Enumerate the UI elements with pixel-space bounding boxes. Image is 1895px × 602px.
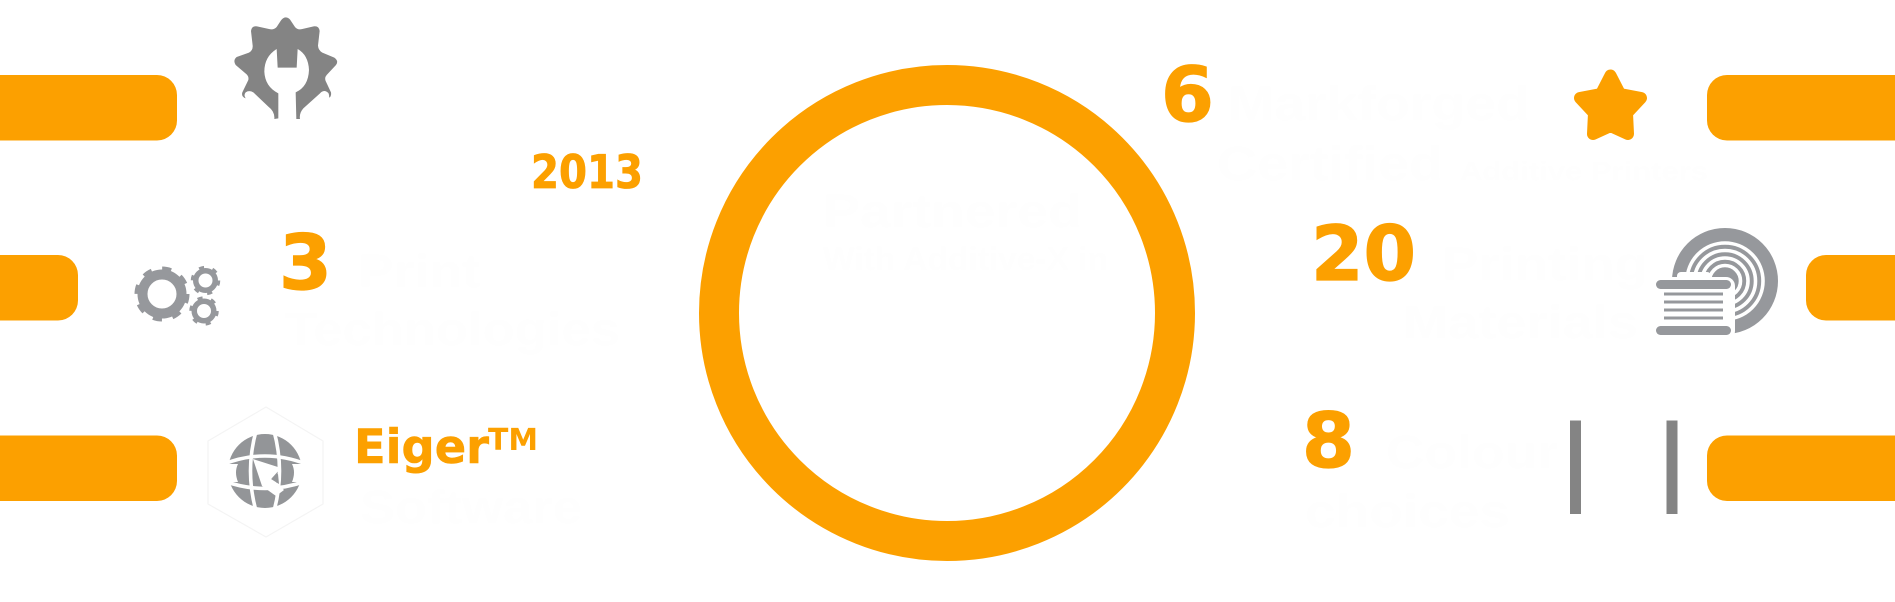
central text: With Additive-X in bbox=[823, 241, 1108, 277]
icon: filament spool bbox=[1653, 228, 1778, 340]
stat: 20 printing materials: Materials bbox=[1403, 296, 1638, 348]
heading: Eiger software: TM bbox=[488, 423, 538, 458]
stat: 2013: 2013 bbox=[531, 145, 643, 199]
central ring bbox=[719, 85, 1175, 541]
stat: 20 printing materials: Printing bbox=[1442, 238, 1648, 290]
stat: 3 print technologies: Technologies bbox=[285, 303, 620, 355]
heading: Eiger software bbox=[354, 420, 582, 533]
bar: left bottom bbox=[0, 436, 177, 501]
icon: globe in hexagon bbox=[208, 407, 323, 537]
stat: 20 printing materials: 20 bbox=[1311, 209, 1416, 298]
stat: 8 colour choices: Colour bbox=[1386, 426, 1558, 478]
bar: right top bbox=[1707, 75, 1895, 140]
icon: vertical filament bars bbox=[1570, 420, 1678, 514]
central text: Partnered bbox=[823, 185, 1082, 237]
stat: 3 print technologies bbox=[279, 218, 620, 355]
heading: Eiger software: Software bbox=[360, 481, 582, 533]
stat: 3 print technologies: Print bbox=[358, 245, 480, 297]
stat: 6 Markforged certified: Certified bbox=[1217, 138, 1443, 191]
bar: right bottom bbox=[1707, 436, 1895, 501]
icon: three gears bbox=[137, 268, 218, 324]
stat: 3 print technologies: 3 bbox=[279, 218, 332, 307]
icon: wrench in gear bbox=[234, 17, 337, 119]
bar: right middle bbox=[1806, 255, 1895, 320]
stat: 6 Markforged certified bbox=[1161, 50, 1708, 191]
icon: star bbox=[1580, 76, 1641, 134]
stat: 20 printing materials bbox=[1311, 209, 1648, 348]
bar: left middle bbox=[0, 255, 78, 320]
stat: 6 Markforged certified: Markforged bbox=[1228, 78, 1530, 131]
heading: Eiger software: Eiger bbox=[354, 420, 490, 475]
stat: 6 Markforged certified: 6 bbox=[1161, 50, 1214, 139]
bar: left top bbox=[0, 75, 177, 140]
stat: 8 colour choices: choices bbox=[1305, 485, 1510, 537]
central text bbox=[823, 185, 1108, 277]
stat: 8 colour choices bbox=[1302, 396, 1558, 537]
stat: 8 colour choices: 8 bbox=[1302, 396, 1355, 485]
stat: 6 Markforged certified: Additive Printers bbox=[1460, 156, 1708, 186]
